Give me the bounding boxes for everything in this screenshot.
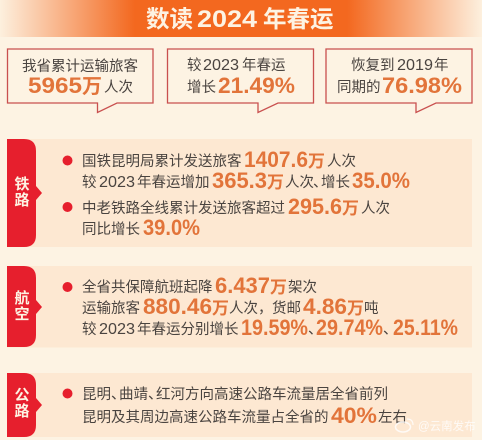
bullet 2 — [62, 202, 72, 212]
bullet 1 — [62, 156, 72, 166]
railway line 3: 人次 — [361, 200, 390, 217]
panel: aviation — [7, 266, 472, 348]
tag: railway: 铁 — [14, 175, 30, 193]
highway line 2: 左右 — [378, 409, 407, 426]
highway line 2: 40% — [331, 403, 377, 428]
railway line 2: 人次 — [285, 174, 314, 191]
aviation line 2: 吨 — [364, 300, 378, 317]
callout: recovery versus 2019: 76.98% — [382, 73, 462, 98]
aviation line 3: 较 — [82, 320, 96, 338]
title banner: 数读 — [146, 6, 193, 32]
aviation line 2: 运输旅客 — [82, 300, 140, 317]
callout: growth over 2023: 年春运 — [242, 57, 286, 74]
aviation line 1: 6.437 — [215, 273, 270, 298]
callout: growth over 2023: 21.49% — [218, 73, 295, 98]
tag: highway: 路 — [14, 402, 30, 420]
aviation line 3: 、 — [308, 322, 322, 338]
highway line 1: 曲靖 — [119, 386, 148, 403]
panel: highway — [7, 373, 472, 437]
railway line 2: 2023 — [99, 174, 135, 191]
highway line 1: 红河方向高速公路车流量居全省前列 — [156, 385, 388, 403]
railway line 1 — [82, 147, 356, 172]
tag: railway: 路 — [14, 191, 30, 209]
bullet — [62, 282, 72, 292]
tag: aviation — [7, 266, 42, 347]
railway line 2: 较 — [82, 173, 96, 191]
callout: passengers total: 5965 — [28, 73, 82, 98]
railway line 2: 、 — [313, 175, 328, 191]
watermark: @云南发布 — [418, 419, 476, 433]
tag: aviation: 空 — [14, 305, 30, 323]
highway line 2 — [82, 403, 407, 428]
bullet — [62, 388, 72, 398]
aviation line 1: 全省共保障航班起降 — [82, 278, 212, 296]
callout: recovery versus 2019: 恢复到 — [351, 56, 394, 74]
aviation line 1: 万 — [270, 278, 287, 297]
aviation line 2: 货邮 — [272, 300, 301, 317]
railway line 1: 人次 — [327, 153, 356, 170]
callout: growth over 2023: 2023 — [203, 57, 239, 74]
highway line 1: 昆明 — [82, 387, 111, 403]
callout: recovery versus 2019: 2019 — [397, 57, 433, 74]
callout: recovery versus 2019: 同期的 — [337, 79, 380, 96]
aviation line 1 — [82, 273, 317, 298]
aviation line 3: 年春运分别增长 — [137, 321, 239, 338]
callout: growth over 2023: 较 — [187, 56, 202, 74]
aviation line 3: 、 — [383, 322, 398, 338]
railway line 2: 增长 — [321, 174, 350, 191]
aviation line 3: 25.11% — [393, 315, 458, 340]
callout: growth over 2023: 增长 — [187, 79, 216, 96]
railway line 4: 39.0% — [143, 215, 200, 240]
railway line 1: 1407.6 — [244, 147, 308, 172]
railway line 2: 年春运增加 — [137, 174, 210, 191]
callout: passengers total: 人次 — [104, 79, 133, 96]
railway line 3: 中老铁路全线累计发送旅客超过 — [82, 199, 285, 217]
aviation line 3: 29.74% — [316, 315, 383, 340]
callout: passengers total: 万 — [82, 76, 102, 98]
title banner: 年春运 — [263, 6, 334, 32]
aviation line 2: ， — [258, 301, 272, 317]
tag: aviation: 航 — [14, 289, 30, 307]
railway line 1: 万 — [308, 152, 325, 171]
railway line 3: 万 — [342, 199, 359, 218]
title banner — [0, 0, 482, 37]
watermark — [396, 419, 476, 433]
tag: railway — [7, 139, 42, 247]
railway line 3 — [82, 194, 390, 219]
railway line 2: 万 — [267, 173, 284, 192]
callout: passengers total: 我省累计运输旅客 — [22, 58, 138, 75]
title banner: 2024 — [197, 6, 258, 33]
aviation line 1: 架次 — [288, 279, 317, 296]
railway line 2: 365.3 — [212, 168, 267, 193]
aviation line 3 — [82, 315, 458, 340]
railway line 2 — [82, 168, 410, 193]
aviation line 2: 880.46 — [143, 294, 212, 319]
callout: recovery versus 2019: 年 — [434, 57, 448, 74]
highway line 1 — [82, 385, 388, 403]
railway line 4: 同比增长 — [82, 221, 140, 238]
aviation line 3: 2023 — [99, 321, 135, 338]
callout: passengers total — [8, 49, 153, 112]
highway line 1: 、 — [111, 387, 126, 403]
railway line 3: 295.6 — [288, 194, 342, 219]
railway line 1: 国铁昆明局累计发送旅客 — [82, 153, 242, 170]
aviation line 2 — [82, 294, 378, 319]
aviation line 2: 万 — [347, 299, 364, 318]
aviation line 3: 19.59% — [241, 315, 308, 340]
highway line 1: 、 — [148, 387, 162, 403]
callout: growth over 2023 — [168, 49, 314, 112]
railway line 4 — [82, 215, 200, 240]
tag: highway: 公 — [14, 387, 30, 404]
panel: railway — [7, 139, 472, 247]
aviation line 2: 人次 — [229, 300, 258, 317]
railway line 2: 35.0% — [352, 168, 410, 193]
tag: highway — [7, 373, 42, 437]
aviation line 2: 4.86 — [303, 294, 347, 319]
callout: recovery versus 2019 — [326, 49, 472, 112]
aviation line 2: 万 — [212, 299, 229, 318]
highway line 2: 昆明及其周边高速公路车流量占全省的 — [82, 408, 328, 426]
